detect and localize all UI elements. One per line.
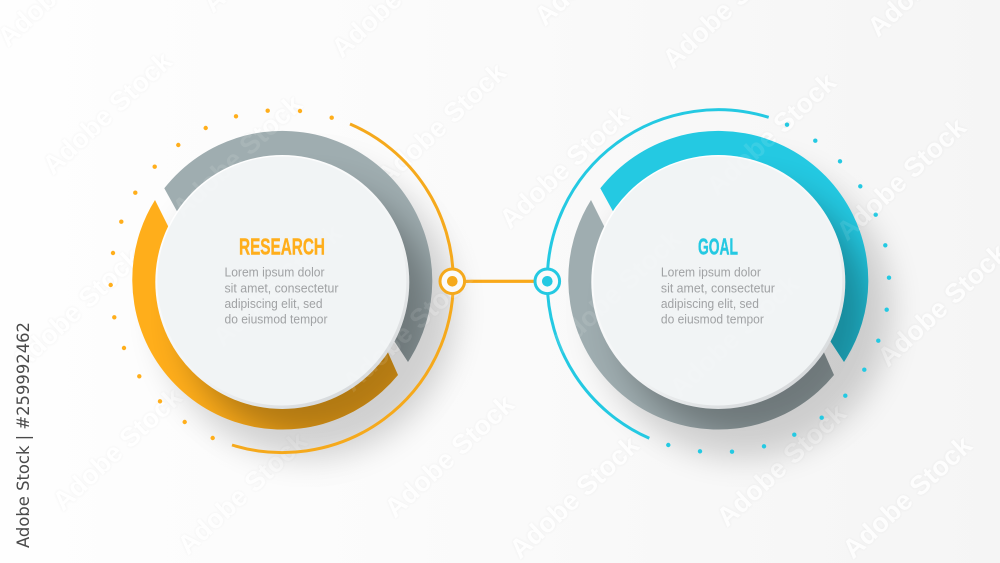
soft outer shadow <box>159 162 455 458</box>
cyan ring segment <box>600 131 868 362</box>
faint watermarks over the artwork <box>167 66 972 403</box>
orange ring segment <box>132 200 398 430</box>
watermarks: Adobe Stock <box>47 381 188 516</box>
connector line <box>465 280 535 283</box>
faint watermarks over the artwork: Adobe Stock <box>664 268 805 403</box>
ring shadow <box>620 188 872 440</box>
vertical stock label: Adobe Stock | #259992462 <box>14 322 34 548</box>
text block: research <box>224 266 338 326</box>
thin orange arc <box>232 124 453 453</box>
node: orange <box>440 269 465 294</box>
thin cyan arc <box>547 110 769 438</box>
watermarks: Adobe Stock <box>371 56 512 191</box>
watermarks: Adobe Stock <box>379 388 520 523</box>
watermarks: Adobe Stock <box>837 429 978 563</box>
watermarks: Adobe Stock <box>167 88 308 223</box>
faint watermarks over the artwork: Adobe Stock <box>207 217 348 352</box>
watermarks: Adobe Stock <box>701 66 842 201</box>
faint watermarks over the artwork: Adobe Stock <box>494 99 635 234</box>
text block: goal <box>661 266 775 326</box>
text block: research: sit amet, consectetur <box>224 281 338 295</box>
panel: goal <box>547 110 891 458</box>
watermarks: Adobe Stock <box>831 111 972 246</box>
watermarks: Adobe Stock <box>711 397 852 532</box>
watermarks: Adobe Stock <box>6 241 147 376</box>
faint watermarks over the artwork: Adobe Stock <box>337 262 478 397</box>
watermarks: Adobe Stock <box>494 99 635 234</box>
watermarks: Adobe Stock <box>172 425 313 560</box>
disc face <box>593 156 842 406</box>
watermarks: Adobe Stock <box>504 429 645 563</box>
faint watermarks over the artwork: Adobe Stock <box>701 66 842 201</box>
heading: research: RESEARCH <box>239 234 325 260</box>
text block: research: Lorem ipsum dolor <box>224 266 324 280</box>
watermarks: Adobe Stock <box>337 262 478 397</box>
text block: research: adipiscing elit, sed <box>224 297 323 311</box>
text block: research: do eiusmod tempor <box>224 312 328 326</box>
text block: goal: adipiscing elit, sed <box>661 297 759 311</box>
watermarks: Adobe Stock <box>37 45 178 180</box>
grey ring segment <box>568 200 834 430</box>
faint watermarks over the artwork: Adobe Stock <box>831 111 972 246</box>
panel: research <box>108 108 455 458</box>
grey ring segment <box>164 131 432 362</box>
node: cyan <box>535 269 560 294</box>
white disc <box>591 155 845 409</box>
ring shadow <box>184 188 436 440</box>
text block: goal: do eiusmod tempor <box>661 312 764 326</box>
disc face <box>157 156 406 406</box>
faint watermarks over the artwork: Adobe Stock <box>167 88 308 223</box>
text block: goal: sit amet, consectetur <box>661 281 775 295</box>
heading: goal: GOAL <box>698 234 738 260</box>
dotted arc <box>666 122 891 454</box>
white disc <box>155 155 409 409</box>
dotted arc <box>108 108 334 440</box>
soft outer shadow <box>595 162 891 458</box>
faint watermarks over the artwork: Adobe Stock <box>546 223 687 358</box>
text block: goal: Lorem ipsum dolor <box>661 266 761 280</box>
